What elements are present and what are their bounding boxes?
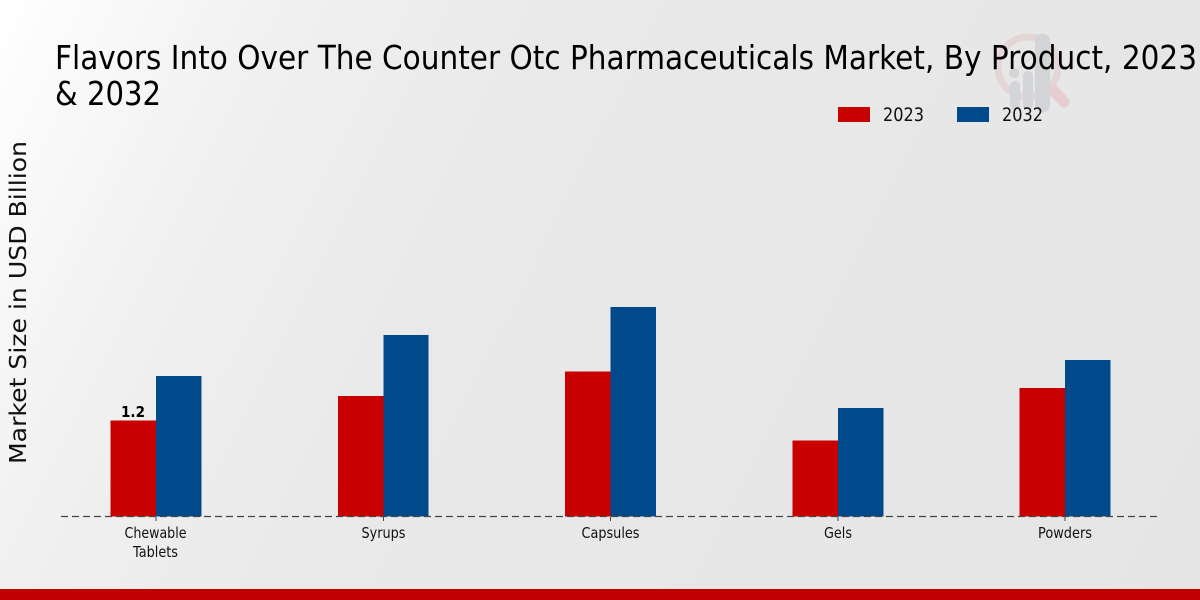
y axis label: Market Size in USD Billion (4, 141, 32, 464)
x axis labels (124, 524, 1092, 561)
value label: 1.2: 1.2 (121, 403, 145, 421)
bars: Gels (792, 408, 884, 516)
bars: Powders (1020, 360, 1110, 516)
legend item: 2032: 2032 (1002, 105, 1043, 126)
footer bar (0, 589, 1200, 600)
legend item: 2023 (838, 105, 924, 126)
legend item: 2023: 2023 (883, 105, 924, 126)
x axis labels: Tablets (132, 543, 178, 561)
x axis labels: Chewable (124, 524, 186, 542)
x axis labels: Gels (824, 524, 852, 542)
bars: Chewable Tablets (110, 376, 202, 516)
bars: Capsules (565, 307, 656, 516)
bar chart (61, 307, 1160, 521)
bars: Syrups (338, 335, 428, 516)
legend item: 2032 (957, 105, 1043, 126)
title: & 2032 (55, 74, 161, 113)
x axis labels: Powders (1038, 524, 1092, 542)
x axis labels: Syrups (362, 524, 406, 542)
title (55, 38, 1197, 113)
x axis labels: Capsules (582, 524, 640, 542)
icon: watermark magnifier logo (998, 37, 1064, 105)
legend (838, 105, 1043, 126)
